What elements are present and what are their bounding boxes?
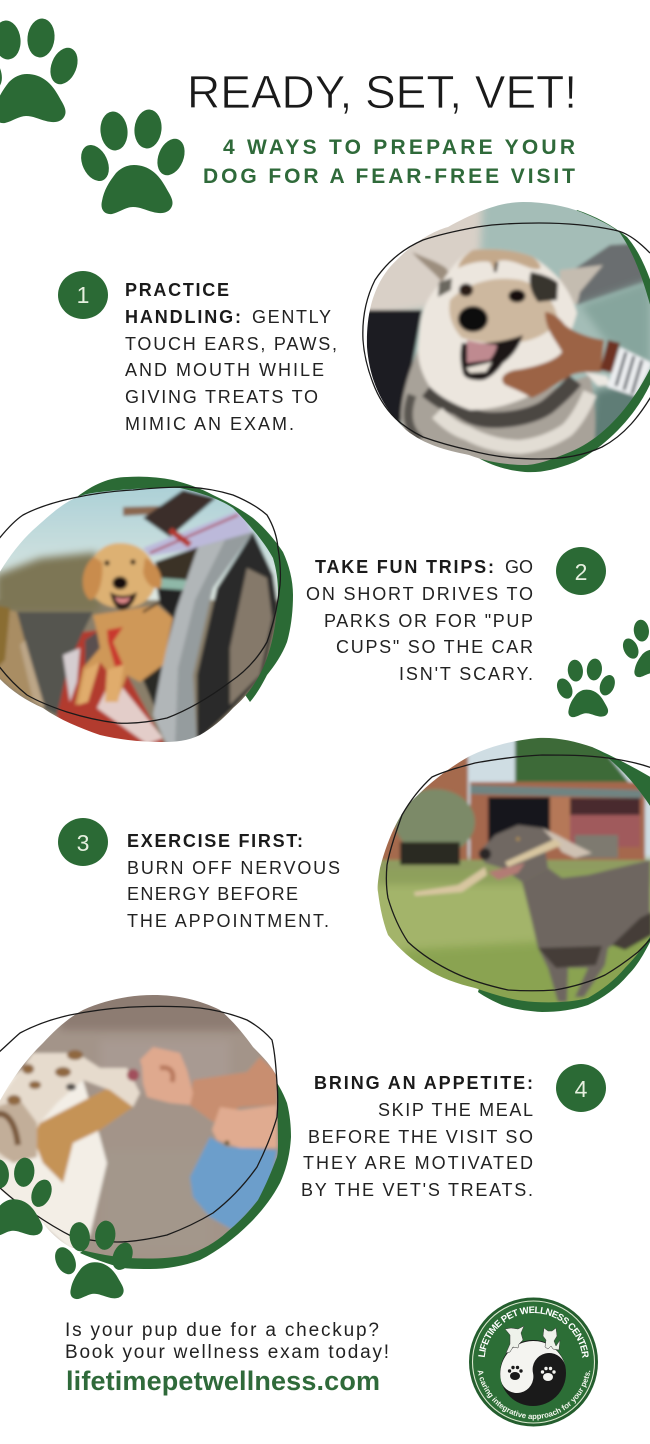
photo: weimaraner with stick (375, 735, 650, 1010)
step 3 text: THE APPOINTMENT. (127, 911, 329, 931)
panel: step 3 (58, 735, 650, 1012)
green blob behind photo 4 (80, 1070, 291, 1269)
step 1 text: TOUCH EARS, PAWS, (125, 334, 337, 354)
step 3 text (127, 831, 340, 931)
hand-drawn outline 4 (0, 1006, 278, 1242)
step 1 text: PRACTICE (125, 280, 229, 300)
step 4 text: THEY ARE MOTIVATED (303, 1153, 533, 1173)
step 2 text: CUPS" SO THE CAR (336, 637, 533, 657)
logo dog and cat (505, 1326, 560, 1353)
icon: top paw 1 (0, 17, 83, 123)
step 2 text: GO (505, 557, 533, 577)
step 3 text: ENERGY BEFORE (127, 884, 298, 904)
logo: Lifetime Pet Wellness Center (469, 1298, 598, 1426)
icon: top paw 2 (76, 108, 190, 214)
number badge 2: 2 (575, 559, 587, 585)
number badge 1 (58, 271, 108, 319)
green blob behind photo 1 (477, 210, 650, 472)
hand-drawn outline 2 (0, 487, 280, 723)
step 2 text: PARKS OR FOR "PUP (324, 611, 533, 631)
icon: paw over photo 4 bottom (51, 1220, 137, 1299)
logo ring text (478, 1306, 590, 1421)
step 2 text: ON SHORT DRIVES TO (306, 584, 533, 604)
panel: step 4 (0, 990, 606, 1299)
subtitle: DOG FOR A FEAR-FREE VISIT (203, 165, 575, 188)
step 4 text (301, 1073, 533, 1200)
step 1 text: GENTLY (252, 307, 331, 327)
icon: paw over photo 4 left (0, 1157, 56, 1236)
hand-drawn outline 3 (386, 755, 650, 991)
subtitle: 4 WAYS TO PREPARE YOUR (223, 136, 575, 159)
step 4 text: BEFORE THE VISIT SO (308, 1127, 533, 1147)
hand-drawn outline 1 (363, 223, 650, 459)
panel: step 2 (0, 477, 650, 750)
logo ring text: LIFETIME PET WELLNESS CENTER (478, 1306, 589, 1358)
step 3 text: BURN OFF NERVOUS (127, 858, 340, 878)
step 2 text (306, 557, 533, 684)
step 2 text: ISN'T SCARY. (399, 664, 533, 684)
number badge 4: 4 (575, 1076, 588, 1102)
photo: husky being petted (360, 195, 650, 475)
logo ring text: A caring integrative approach for your pets. (478, 1370, 590, 1421)
green blob behind photo 3 (478, 747, 650, 1012)
step 4 text: BRING AN APPETITE: (314, 1073, 533, 1093)
number badge 3 (58, 818, 108, 866)
photo: golden retriever in car window (0, 488, 278, 742)
call to action (65, 1320, 389, 1396)
step 1 text: HANDLING: (125, 307, 241, 327)
step 1 text: MIMIC AN EXAM. (125, 414, 294, 434)
number badge 2 (556, 547, 606, 595)
panel: step 1 (58, 195, 650, 475)
step 3 text: EXERCISE FIRST: (127, 831, 303, 851)
step 4 text: SKIP THE MEAL (378, 1100, 533, 1120)
title: READY, SET, VET! (187, 66, 577, 118)
icon: paw at right edge (620, 618, 650, 677)
step 2 text: TAKE FUN TRIPS: (315, 557, 494, 577)
number badge 4 (556, 1064, 606, 1112)
call to action: Book your wellness exam today! (65, 1342, 389, 1363)
step 1 text: GIVING TREATS TO (125, 387, 318, 407)
step 4 text: BY THE VET'S TREATS. (301, 1180, 533, 1200)
number badge 3: 3 (77, 830, 89, 856)
green blob behind photo 2 (77, 477, 293, 702)
number badge 1: 1 (77, 282, 89, 308)
step 1 text (125, 280, 337, 434)
subtitle (203, 136, 575, 188)
logo yin-yang (500, 1340, 566, 1406)
step 1 text: AND MOUTH WHILE (125, 360, 324, 380)
call to action: lifetimepetwellness.com (66, 1366, 380, 1396)
photo: dog taking a treat (0, 990, 285, 1265)
icon: paw near step 2 (554, 658, 618, 717)
call to action: Is your pup due for a checkup? (65, 1320, 379, 1341)
